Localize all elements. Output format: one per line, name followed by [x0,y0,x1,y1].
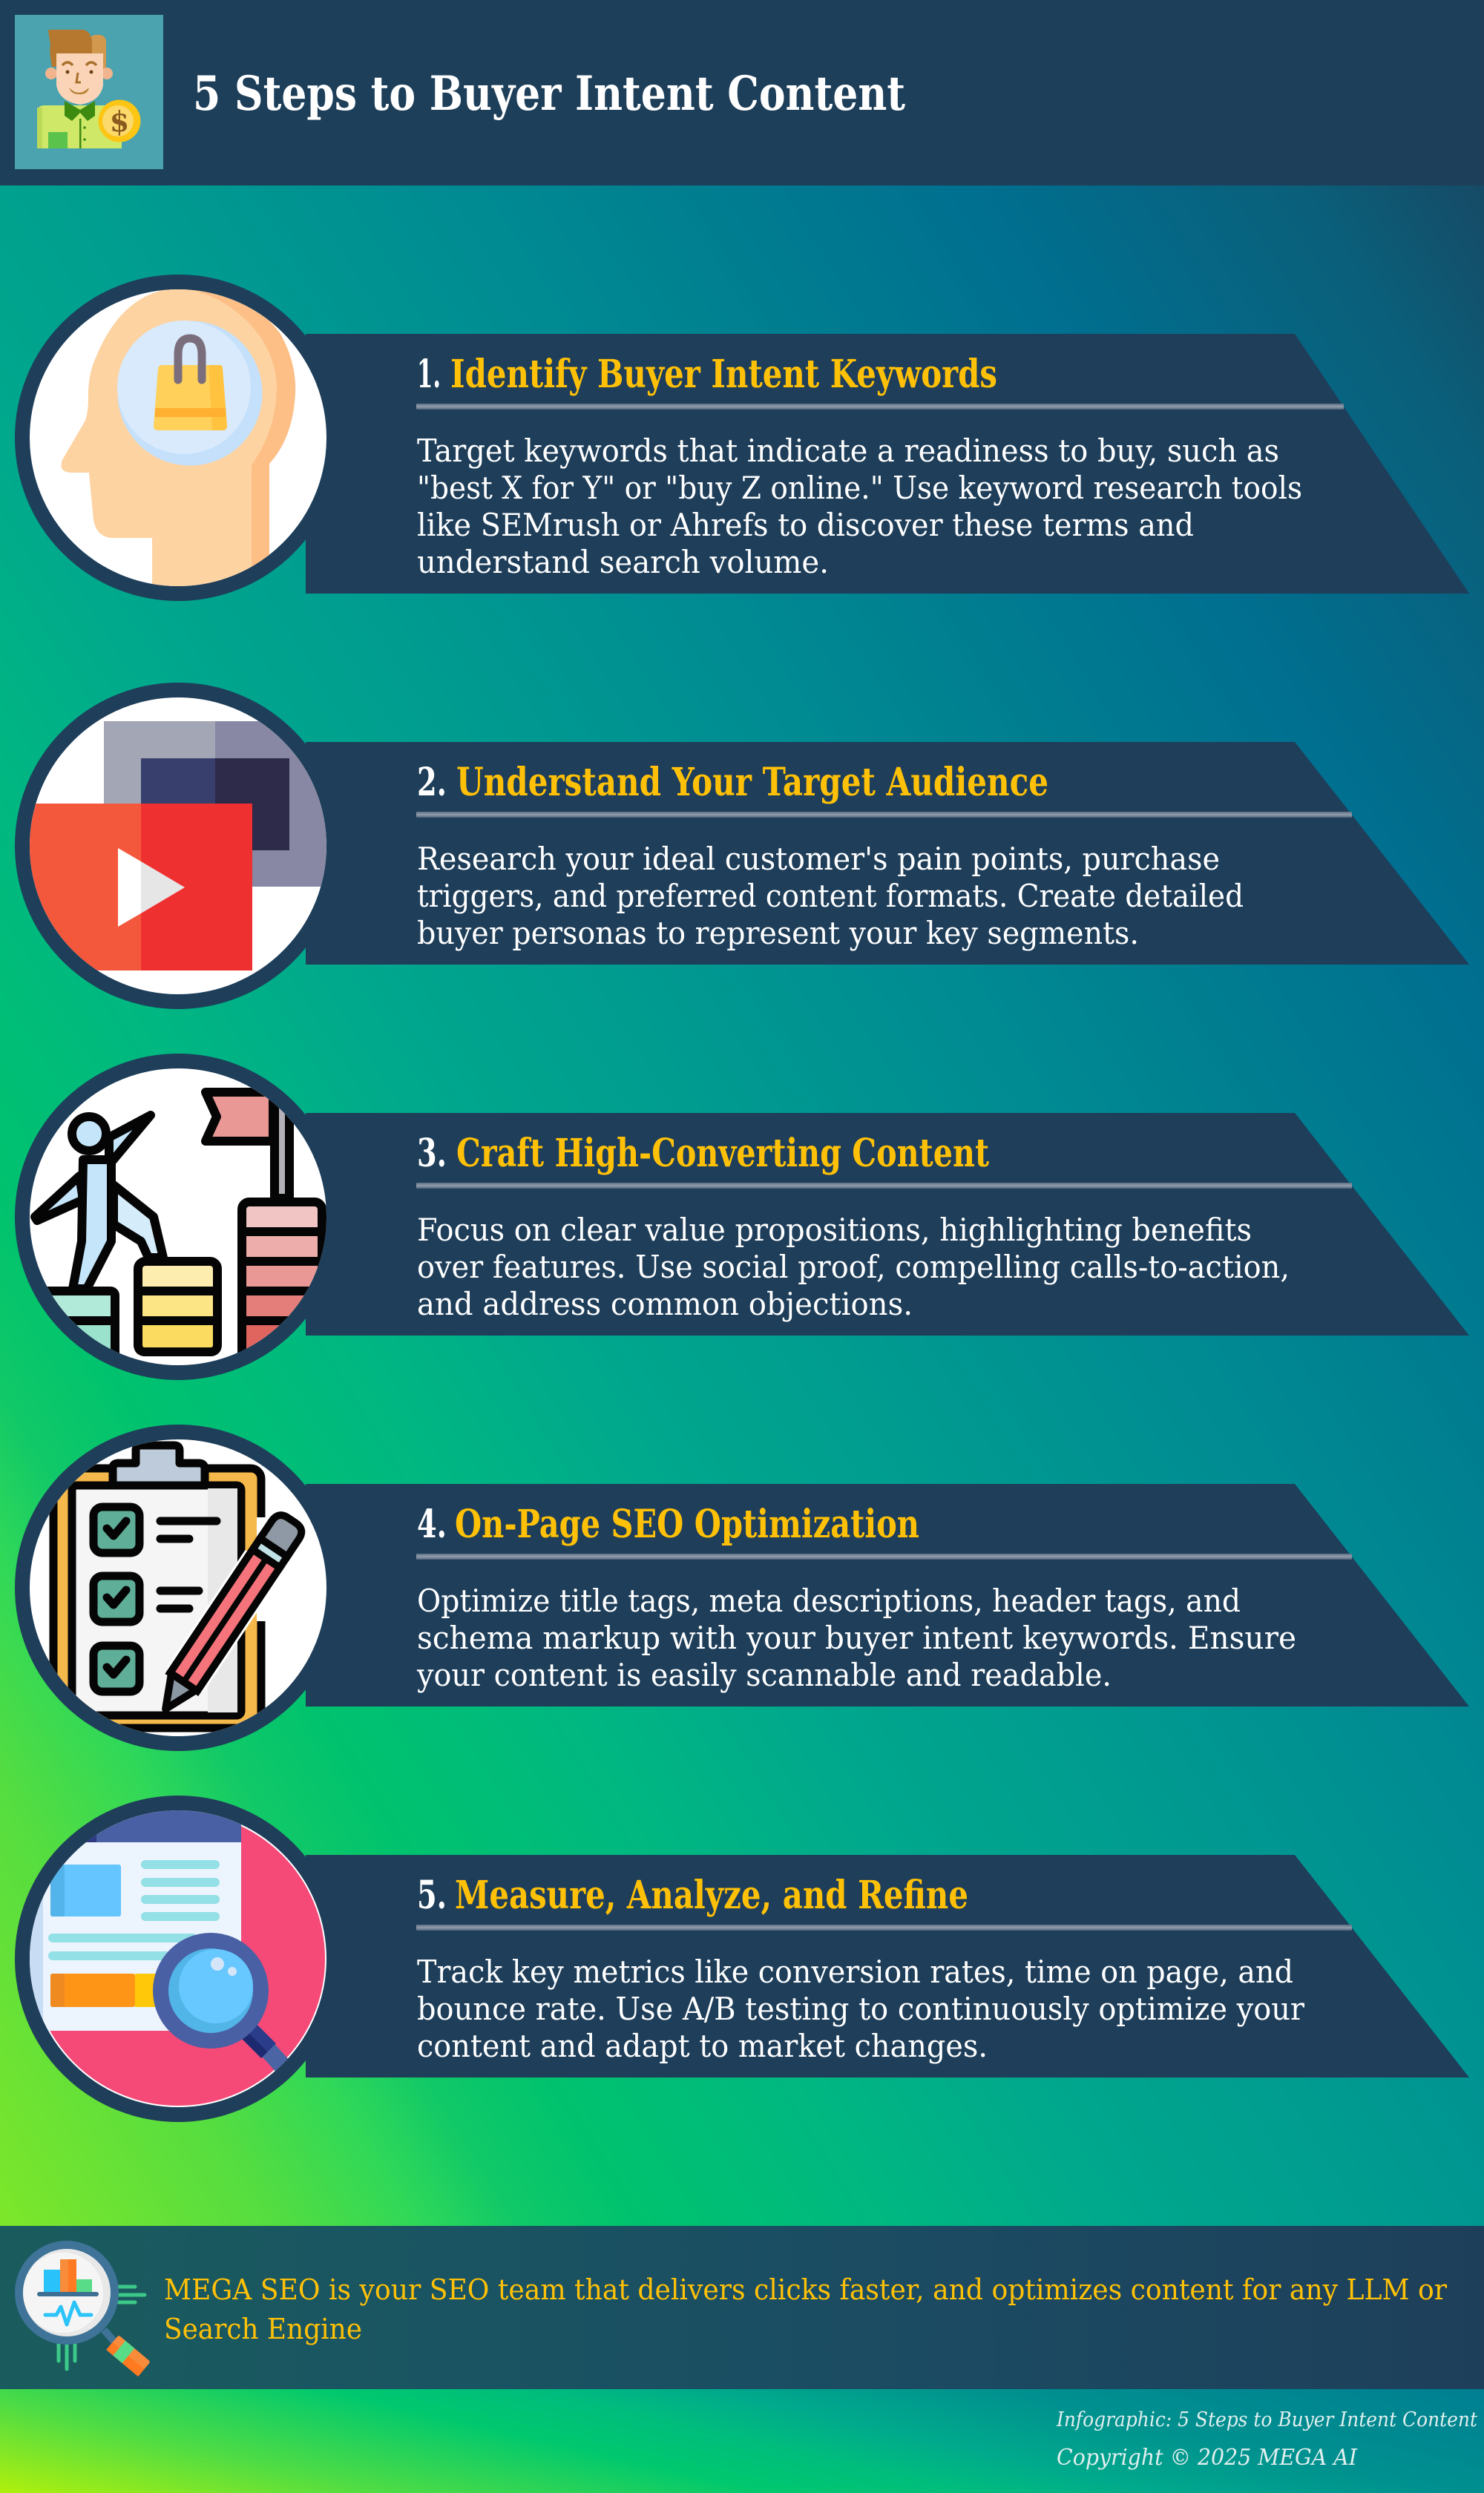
step 3 heading: Craft High-Converting Content [456,1131,989,1176]
step 3 body [417,1212,1290,1322]
step 3 body: over features. Use social proof, compelling calls-to-action, [417,1249,1290,1285]
step 2 heading: 2. [417,760,447,805]
footer tagline: MEGA SEO is your SEO team that delivers clicks faster, and optimizes content for any LLM or [164,2273,1448,2306]
step 4 heading: On-Page SEO Optimization [455,1502,919,1547]
step 1 heading: Identify Buyer Intent Keywords [450,352,997,397]
step 5 heading: Measure, Analyze, and Refine [455,1873,968,1918]
step 4 panel [306,1484,1469,1707]
footer tagline: Search Engine [164,2313,362,2345]
icon: checklist and pencil [22,1432,334,1744]
step 2 body: buyer personas to represent your key segments. [417,915,1139,951]
step 2 panel [306,742,1469,965]
step 1 body: understand search volume. [417,544,829,580]
step 5 body: Track key metrics like conversion rates, time on page, and [417,1954,1293,1990]
icon: climbing steps to flag [15,1061,334,1373]
step 2 heading: Understand Your Target Audience [456,760,1048,805]
step 5 body: bounce rate. Use A/B testing to continuously optimize your [417,1991,1305,2027]
icon: web page and magnifier [22,1803,334,2115]
step 1 body: like SEMrush or Ahrefs to discover these terms and [417,507,1194,543]
step 4 body: schema markup with your buyer intent keywords. Ensure [417,1620,1296,1656]
title: 5 Steps to Buyer Intent Content [193,66,905,122]
step 4 body: Optimize title tags, meta descriptions, header tags, and [417,1583,1241,1619]
icon: magnifier with charts [15,2241,151,2377]
step 5 body [417,1954,1305,2064]
icon: video play layers [22,690,334,1002]
step 3 body: Focus on clear value propositions, highlighting benefits [417,1212,1252,1248]
footer band [0,2226,1484,2389]
footer tagline [164,2273,1448,2345]
icon: head with shopping bag [22,282,334,594]
step 4 heading: 4. [417,1502,447,1547]
step 1 body: Target keywords that indicate a readiness to buy, such as [417,433,1279,469]
step 2 body: Research your ideal customer's pain points, purchase [417,841,1220,877]
step 3 heading: 3. [417,1131,447,1176]
step 2 body [417,841,1244,951]
icon: man with coin [15,15,163,169]
step 1 panel [306,334,1469,594]
icon: man with coin: $ [110,105,129,138]
step 2 body: triggers, and preferred content formats. Create detailed [417,878,1244,914]
step 4 body: your content is easily scannable and readable. [416,1657,1112,1693]
step 3 panel [306,1113,1469,1336]
step 1 body [417,433,1302,580]
credit: copyright: Copyright © 2025 MEGA AI [1057,2445,1358,2471]
step 3 body: and address common objections. [417,1286,913,1322]
step 4 body [416,1583,1296,1693]
step 5 body: content and adapt to market changes. [417,2028,988,2064]
step 5 heading: 5. [417,1873,447,1918]
step 1 body: "best X for Y" or "buy Z online." Use keyword research tools [417,470,1302,506]
header band [0,0,1484,185]
step 5 panel [306,1855,1469,2078]
step 1 heading: 1. [417,352,441,397]
